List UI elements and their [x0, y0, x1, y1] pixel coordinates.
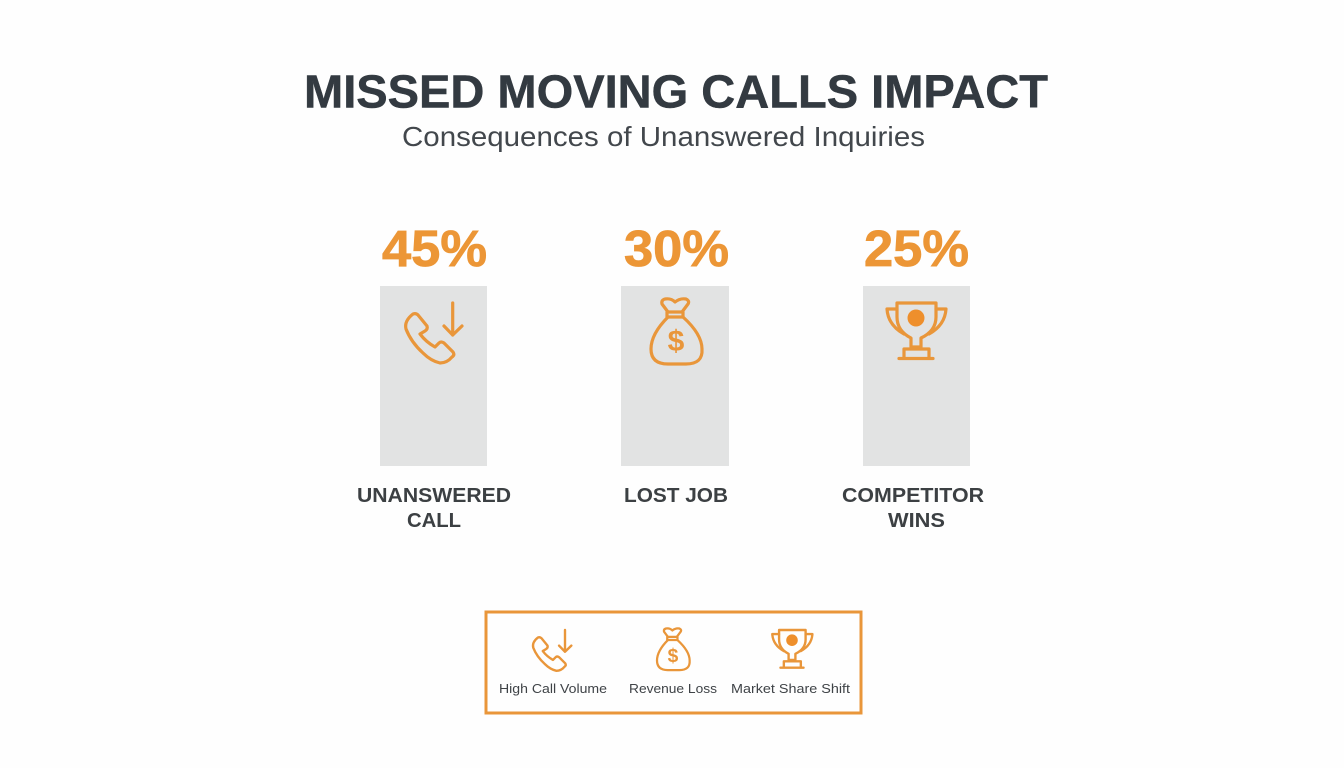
icon: trophy small: [772, 630, 812, 668]
panel: competitor wins: [842, 220, 985, 532]
legend item: market share shift: [731, 630, 850, 696]
label: LOST JOB: [624, 485, 728, 507]
title: MISSED MOVING CALLS IMPACT: [304, 66, 1048, 118]
percentage 25%: 25%: [864, 220, 969, 277]
legend text: High Call Volume: [499, 681, 607, 696]
icon: phone with down arrow: [406, 303, 462, 363]
label: WINS: [888, 510, 945, 532]
icon: trophy: [887, 303, 946, 358]
label: CALL: [407, 510, 461, 532]
bar: [380, 286, 487, 466]
label: UNANSWERED: [357, 485, 511, 507]
icon: money bag small: $: [668, 646, 679, 667]
legend border: [486, 612, 861, 713]
panel: legend: [486, 612, 861, 713]
legend item: high call volume: [499, 630, 607, 696]
icon: phone small: [533, 630, 571, 671]
percentage 45%: 45%: [382, 220, 487, 277]
panel: unanswered call: [357, 220, 511, 532]
label: [357, 485, 511, 532]
legend text: Revenue Loss: [629, 681, 718, 696]
legend item: revenue loss: [629, 628, 718, 696]
label: COMPETITOR: [842, 485, 985, 507]
bar: [621, 286, 729, 466]
legend text: Market Share Shift: [731, 681, 850, 696]
bar: [863, 286, 970, 466]
panel: lost job: [621, 220, 729, 507]
percentage 30%: 30%: [624, 220, 729, 277]
icon: money bag: $: [668, 325, 685, 358]
label: [842, 485, 985, 532]
subtitle: Consequences of Unanswered Inquiries: [402, 121, 925, 152]
icon: money bag: [651, 299, 702, 364]
